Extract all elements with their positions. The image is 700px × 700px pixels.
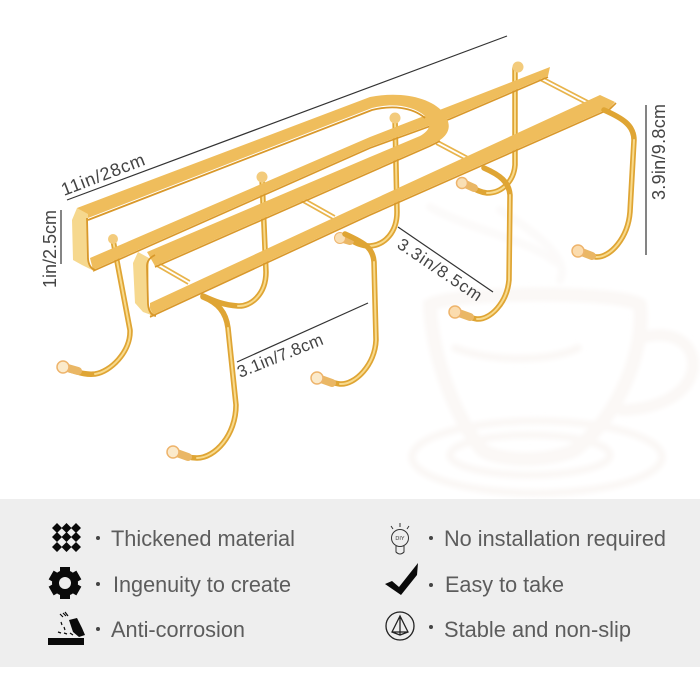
hook: front far left [57, 234, 130, 374]
icon: corrosion [48, 612, 85, 645]
hook: rear left [203, 172, 268, 306]
icon: diamond grid [52, 523, 81, 552]
feature: thickened material [52, 523, 295, 552]
hook: front right centre [449, 168, 510, 319]
icon: DIY bulb [391, 523, 409, 554]
rail: U-shaped arch [77, 95, 449, 267]
feature: thickened material: Thickened material [111, 526, 295, 551]
icon: gear [49, 567, 81, 599]
dimension: thickness: 1in/2.5cm [40, 210, 60, 288]
feature: no installation: No installation required [444, 526, 666, 551]
hook: rear right [456, 62, 524, 193]
feature panel background [0, 499, 700, 667]
front hooks [167, 110, 634, 458]
dimension: length: 11in/28cm [58, 150, 148, 200]
left end plate: upper frame [72, 208, 95, 271]
feature: easy to take: Easy to take [445, 572, 564, 597]
feature: stable and non-slip [386, 612, 631, 642]
feature: anti-corrosion: Anti-corrosion [111, 617, 245, 642]
rail: front long rail [150, 95, 616, 317]
dimension: length [58, 36, 507, 200]
dimension: depth: 3.3in/8.5cm [394, 235, 486, 305]
icon: check mark [385, 563, 418, 595]
icon: circled cone [386, 612, 414, 640]
feature: anti-corrosion [48, 612, 245, 645]
dimension: height: 3.9in/9.8cm [649, 104, 669, 200]
rack rails [72, 67, 616, 317]
rail: rear long rail [90, 67, 550, 271]
feature: easy to take [385, 563, 564, 597]
rear hooks [57, 62, 524, 374]
hook: rear centre [343, 112, 400, 246]
dimension: hook spacing: 3.1in/7.8cm [234, 330, 326, 382]
dimension: hook spacing [234, 303, 368, 382]
feature: ingenuity: Ingenuity to create [113, 572, 291, 597]
feature: stable and non-slip: Stable and non-slip [444, 617, 631, 642]
hook: front second [167, 297, 236, 458]
left end plate: lower frame [133, 252, 156, 316]
icon: DIY bulb: DIY [395, 536, 405, 542]
cross bars [155, 76, 592, 284]
coffee cup watermark [412, 207, 693, 493]
feature: ingenuity [49, 567, 291, 599]
hook: front far right [572, 110, 634, 257]
feature: no installation [391, 523, 666, 554]
stub: centre hook tip [334, 232, 350, 244]
hook: front centre [311, 234, 376, 384]
